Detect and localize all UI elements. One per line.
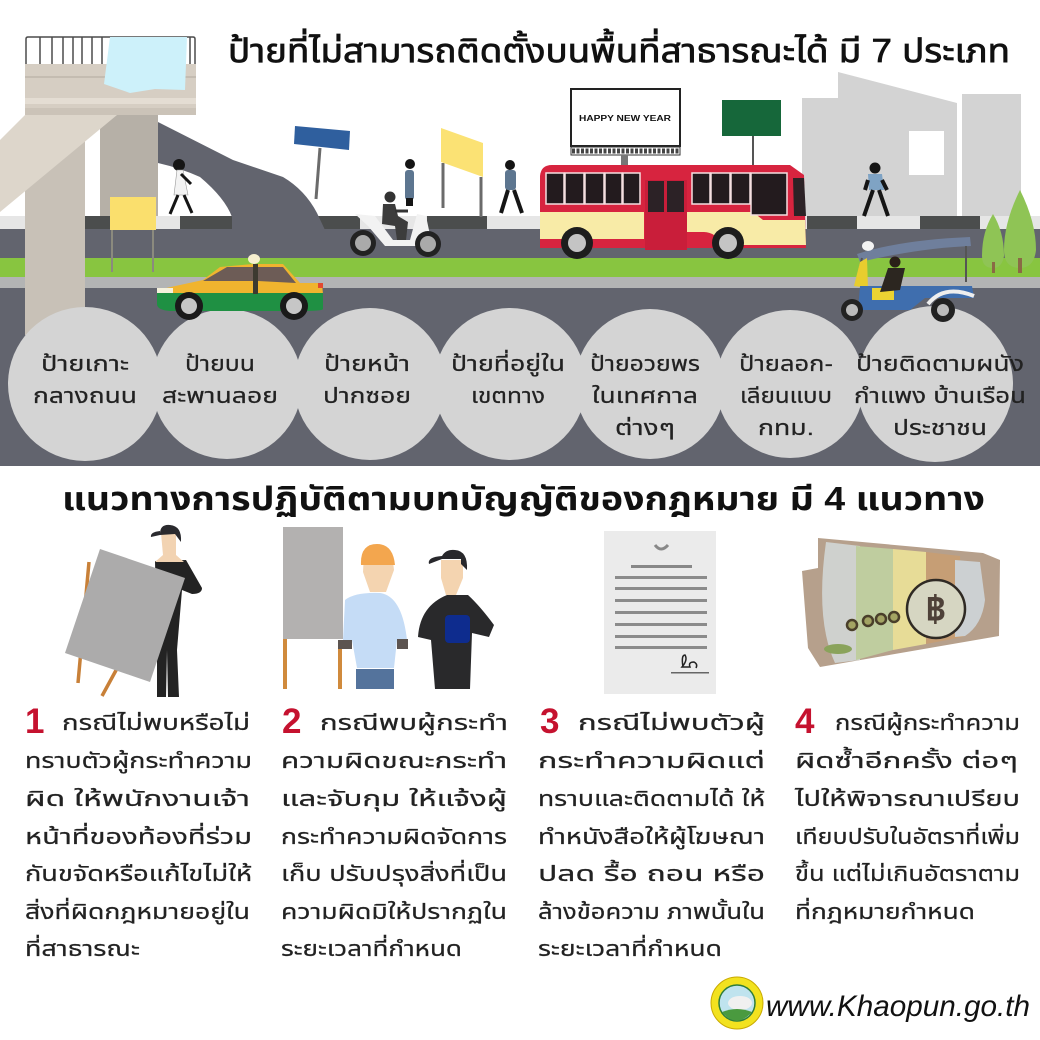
circle 7: ประชาชน bbox=[893, 417, 987, 440]
step 4: ไปให้พิจารณาเปรียบ bbox=[794, 787, 1020, 811]
type circles row bbox=[8, 306, 1026, 462]
step 2 bbox=[281, 702, 508, 961]
circle 5: ต่างๆ bbox=[615, 416, 675, 440]
icon: worker and officer with sign bbox=[283, 527, 494, 689]
step 3: ล้างข้อความ ภาพนั้นใน bbox=[538, 898, 765, 924]
circle 3: ปากซอย bbox=[323, 385, 411, 408]
icon: baht banknotes: ฿ bbox=[926, 589, 946, 630]
tuk-tuk bbox=[841, 237, 974, 322]
step 4: ผิดซ้ำอีกครั้ง ต่อๆ bbox=[795, 746, 1018, 773]
taxi bbox=[157, 254, 323, 320]
sign: blue bbox=[294, 126, 350, 199]
person: walking right bbox=[864, 162, 888, 216]
icon: signed document bbox=[604, 531, 716, 694]
circle 2: ป้ายบน bbox=[185, 353, 255, 376]
step 2: เก็บ ปรับปรุงสิ่งที่เป็น bbox=[281, 859, 507, 887]
step 2: กระทำความผิดจัดการ bbox=[281, 826, 507, 849]
circle 4: ป้ายที่อยู่ใน bbox=[451, 349, 565, 377]
step 2: กรณีพบผู้กระทำ bbox=[320, 711, 508, 736]
step 2: ความผิดมิให้ปรากฏใน bbox=[281, 900, 507, 924]
green sign bbox=[722, 100, 781, 166]
flyover ramp bbox=[158, 122, 325, 230]
step 4: ขึ้น แต่ไม่เกินอัตราตาม bbox=[795, 859, 1020, 886]
background buildings bbox=[802, 72, 1021, 216]
step 3: 3 bbox=[540, 702, 559, 741]
person: woman walking bbox=[170, 159, 192, 214]
step 1: ผิด ให้พนักงานเจ้า bbox=[25, 787, 250, 811]
circle 6: ป้ายลอก- bbox=[739, 353, 833, 376]
step 1: ที่สาธารณะ bbox=[25, 934, 140, 961]
step 3: ทราบและติดตามได้ ให้ bbox=[538, 787, 765, 811]
circle 1 bbox=[8, 307, 162, 461]
sidewalk and road surfaces bbox=[0, 216, 1040, 466]
section heading: แนวทางการปฏิบัติตามบทบัญญัติของกฎหมาย มี 4 แนวทาง bbox=[62, 480, 985, 517]
step 3: ทำหนังสือให้ผู้โฆษณา bbox=[538, 825, 765, 850]
bus bbox=[540, 165, 806, 259]
step 3: ระยะเวลาที่กำหนด bbox=[538, 934, 722, 961]
step 1: กันขจัดหรือแก้ไขไม่ให้ bbox=[25, 862, 252, 886]
trees bbox=[982, 190, 1036, 273]
step 1: 1 bbox=[25, 702, 44, 741]
step 1: ทราบตัวผู้กระทำความ bbox=[25, 749, 252, 774]
circle 7: ป้ายติดตามผนัง bbox=[856, 353, 1024, 376]
sign: yellow bbox=[441, 128, 483, 217]
circle 4 bbox=[434, 308, 586, 460]
step 2: 2 bbox=[282, 702, 301, 741]
person: standing bbox=[405, 159, 415, 206]
circle 7: กำแพง บ้านเรือน bbox=[854, 384, 1026, 408]
step 1: หน้าที่ของท้องที่ร่วม bbox=[25, 822, 252, 849]
title: ป้ายที่ไม่สามารถติดตั้งบนพื้นที่สาธารณะได้ มี 7 ประเภท bbox=[228, 28, 1010, 69]
circle 6: เลียนแบบ bbox=[740, 385, 832, 408]
step 2: ระยะเวลาที่กำหนด bbox=[281, 934, 462, 961]
icon: man holding sign bbox=[65, 525, 202, 697]
step 4: 4 bbox=[795, 702, 815, 741]
website url: www.Khaopun.go.th bbox=[766, 990, 1030, 1023]
step 3: ปลด รื้อ ถอน หรือ bbox=[538, 859, 765, 886]
circle 1: กลางถนน bbox=[33, 385, 137, 408]
step 1: กรณีไม่พบหรือไม่ bbox=[62, 711, 250, 735]
sign: median yellow bbox=[110, 197, 156, 272]
new year billboard bbox=[571, 89, 680, 165]
circle 5: ในเทศกาล bbox=[592, 385, 698, 408]
step 4: เทียบปรับในอัตราที่เพิ่ม bbox=[795, 822, 1020, 849]
step 2: ความผิดขณะกระทำ bbox=[281, 750, 507, 773]
circle 6: กทม. bbox=[758, 417, 814, 440]
motorcycle bbox=[350, 192, 441, 257]
person: walking with blue shirt bbox=[501, 160, 522, 213]
new year billboard: HAPPY NEW YEAR bbox=[579, 114, 671, 123]
circle 3: ป้ายหน้า bbox=[324, 352, 410, 376]
pedestrian bridge bbox=[0, 37, 196, 335]
circle 2: สะพานลอย bbox=[162, 385, 278, 408]
step 3: กรณีไม่พบตัวผู้ bbox=[578, 711, 765, 736]
circle 5 bbox=[575, 309, 725, 459]
icon: baht banknotes bbox=[802, 538, 1000, 667]
circle 5: ป้ายอวยพร bbox=[590, 353, 700, 376]
circle 3 bbox=[294, 308, 446, 460]
step 1 bbox=[25, 702, 252, 961]
step 1: สิ่งที่ผิดกฎหมายอยู่ใน bbox=[25, 897, 250, 925]
circle 6 bbox=[716, 310, 864, 458]
step 4: กรณีผู้กระทำความ bbox=[835, 711, 1020, 736]
icon: Khaopun logo bbox=[711, 977, 763, 1029]
step 4: ที่กฎหมายกำหนด bbox=[795, 897, 975, 924]
step 3 bbox=[538, 702, 765, 961]
circle 2 bbox=[152, 309, 302, 459]
step 2: และจับกุม ให้แจ้งผู้ bbox=[281, 787, 507, 812]
step 4 bbox=[794, 702, 1020, 924]
street scene illustration bbox=[0, 37, 1040, 466]
circle 4: เขตทาง bbox=[471, 385, 545, 408]
circle 1: ป้ายเกาะ bbox=[41, 353, 129, 376]
circle 7 bbox=[854, 306, 1026, 462]
step 3: กระทำความผิดแต่ bbox=[538, 749, 765, 773]
